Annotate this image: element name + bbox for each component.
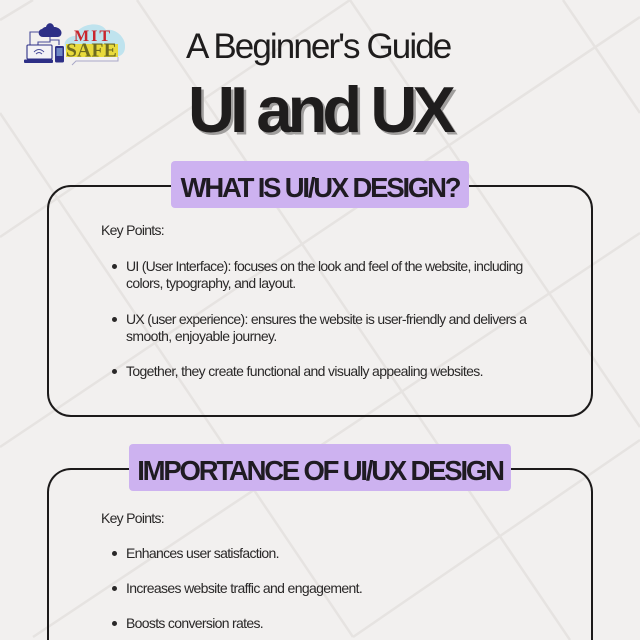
panel outline: [47, 468, 593, 640]
heading: what is UI/UX design: [171, 161, 469, 208]
panel outline: [47, 185, 593, 417]
bullet: UI: colors, typography, and layout.: [126, 275, 295, 291]
panel: what is UI/UX design: [47, 161, 593, 417]
logo: [24, 23, 125, 66]
bullet: UX: [112, 311, 527, 344]
heading: importance of UI/UX design: IMPORTANCE OF UI/UX DESIGN: [137, 455, 503, 486]
bullet: UX: smooth, enjoyable journey.: [126, 328, 277, 344]
heading: what is UI/UX design: WHAT IS UI/UX DESIGN?: [181, 172, 459, 203]
bullet: conversion: Boosts conversion rates.: [126, 615, 263, 631]
panel: importance of UI/UX design: [47, 444, 593, 640]
title: A Beginner's Guide: A Beginner's Guide: [186, 27, 450, 66]
title: UI and UX: UI and UX: [188, 73, 451, 146]
logo wire: [72, 57, 118, 65]
bullet: together: Together, they create functional and visually appealing websites.: [126, 363, 483, 379]
bullet: UI: UI (User Interface): focuses on the look and feel of the website, including: [126, 258, 523, 274]
text: key points: Key Points:: [101, 510, 164, 526]
bullet: traffic: Increases website traffic and engagement.: [126, 580, 362, 596]
bullet list: [112, 258, 527, 379]
icon: network cloud and devices: [24, 23, 64, 63]
logo text: SAFE: SAFE: [66, 40, 117, 62]
text: key points: Key Points:: [101, 222, 164, 238]
bullet: UX: UX (user experience): ensures the website is user-friendly and delivers a: [126, 311, 526, 327]
heading: importance of UI/UX design: [129, 444, 511, 491]
logo backing: SAFE: [66, 44, 118, 57]
bullet: satisfaction: Enhances user satisfaction.: [126, 545, 279, 561]
icon: pale cloud: [65, 24, 125, 57]
logo text: MIT: MIT: [74, 28, 112, 45]
bullet: UI: [112, 258, 523, 291]
